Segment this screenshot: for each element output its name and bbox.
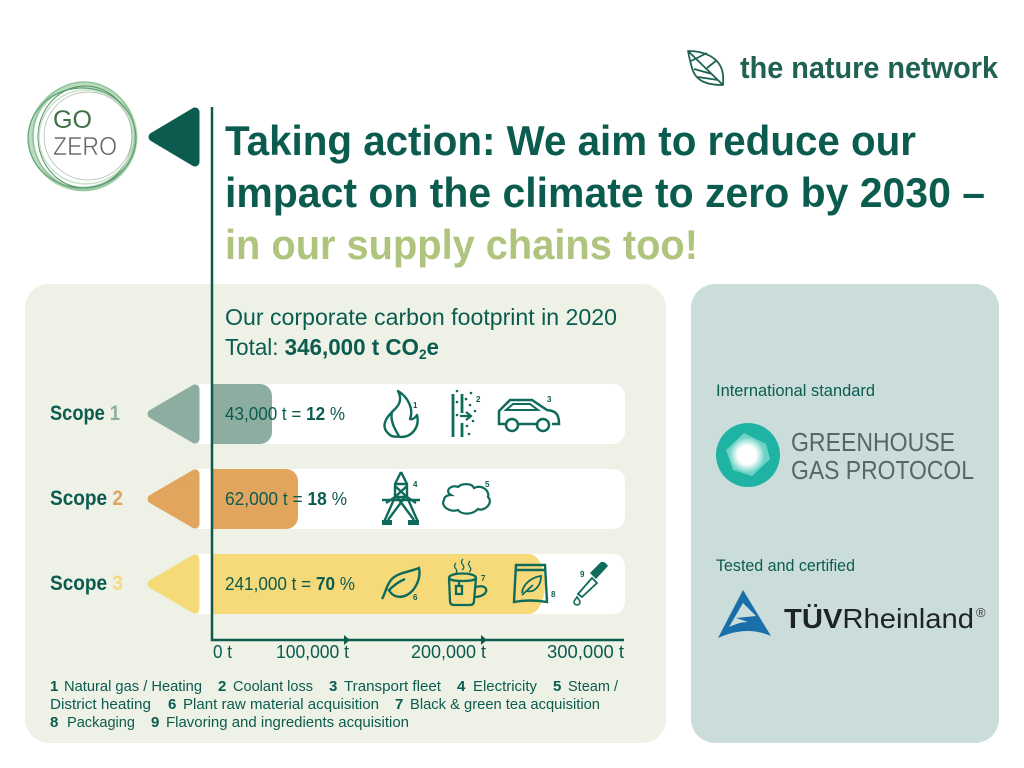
panel: carbon footprint [25,284,666,743]
legend: 6 [168,696,176,713]
logo: go zero: ZERO [53,131,117,161]
legend: Steam / [568,678,619,695]
chart axes: 100,000 t [276,641,349,662]
chart axes: 300,000 t [547,641,624,662]
label: international standard: International standard [716,382,875,400]
icon: leaf 6 [382,568,419,602]
chart axes: 200,000 t [411,641,486,662]
bar: scope 3: 241,000 t = 70 % [225,573,355,594]
legend: Transport fleet [344,678,442,695]
chart heading: Our corporate carbon footprint in 2020 [225,304,617,330]
legend: 2 [218,678,226,695]
chart heading: Total: 346,000 t CO [225,334,423,360]
icon: pylon 4 [382,472,420,525]
title: Taking action: We aim to reduce our [225,117,916,164]
legend: Coolant loss [233,678,313,695]
legend: 5 [553,678,561,695]
bar: scope 2: 62,000 t = 18 % [225,488,347,509]
bar: scope 1: 43,000 t = 12 % [225,403,345,424]
icon: cloud 5 [443,480,490,514]
bar: scope 1 [50,384,625,444]
legend: Natural gas / Heating [64,678,202,695]
logo: greenhouse gas protocol: GREENHOUSE [791,427,955,457]
legend: Flavoring and ingredients acquisition [166,714,409,731]
title: impact on the climate to zero by 2030 – [225,169,985,216]
legend: 4 [457,678,466,695]
icon: car 3 [499,395,559,431]
icon: packaging 8: 8 [551,590,556,599]
legend: 9 [151,714,159,731]
logo: tuv rheinland: TÜVRheinland [784,603,974,634]
bar: scope 3 [50,554,625,614]
icon: coolant loss 2: 2 [476,395,481,404]
legend: Packaging [67,714,135,731]
label: tested and certified: Tested and certified [716,557,855,575]
icon: leaf 6: 6 [413,593,418,602]
legend: Black & green tea acquisition [410,696,600,713]
logo: greenhouse gas protocol [716,423,974,487]
icon: packaging 8 [514,565,556,602]
logo: tuv rheinland [718,590,986,638]
icon: cloud 5: 5 [485,480,490,489]
chart axes: 0 t [213,641,232,662]
icon: flame 1: 1 [413,401,418,410]
legend: 1 [50,678,58,695]
legend: District heating [50,696,151,713]
icon: car 3: 3 [547,395,552,404]
logo: greenhouse gas protocol: GAS PROTOCOL [791,455,974,485]
chart heading [225,304,617,362]
arrow: header pointer [153,112,195,162]
logo: go zero [28,82,136,190]
legend [50,678,619,731]
bar: scope 3: Scope 3 [50,572,123,595]
title [225,117,985,268]
icon: tea cup 7 [449,559,486,605]
chart axes [212,107,624,662]
legend: 7 [395,696,403,713]
panel: standards [691,284,999,743]
logo: the nature network: the nature network [740,50,999,85]
legend: 8 [50,714,58,731]
legend: 3 [329,678,337,695]
legend: Electricity [473,678,537,695]
chart heading: 2 [419,346,427,362]
bar: scope 2 [50,469,625,529]
bar: scope 2: Scope 2 [50,487,123,510]
logo: tuv rheinland: ® [976,605,986,620]
chart heading: e [427,334,439,360]
icon: coolant loss 2 [453,390,481,437]
icon: tea cup 7: 7 [481,574,486,583]
legend: Plant raw material acquisition [183,696,379,713]
logo: go zero: GO [53,106,92,134]
icon: dropper 9: 9 [580,570,585,579]
icon: dropper 9 [574,562,608,605]
icon: flame 1 [384,391,418,437]
title: in our supply chains too! [225,221,698,268]
bar: scope 1: Scope 1 [50,402,120,425]
icon: pylon 4: 4 [413,480,418,489]
